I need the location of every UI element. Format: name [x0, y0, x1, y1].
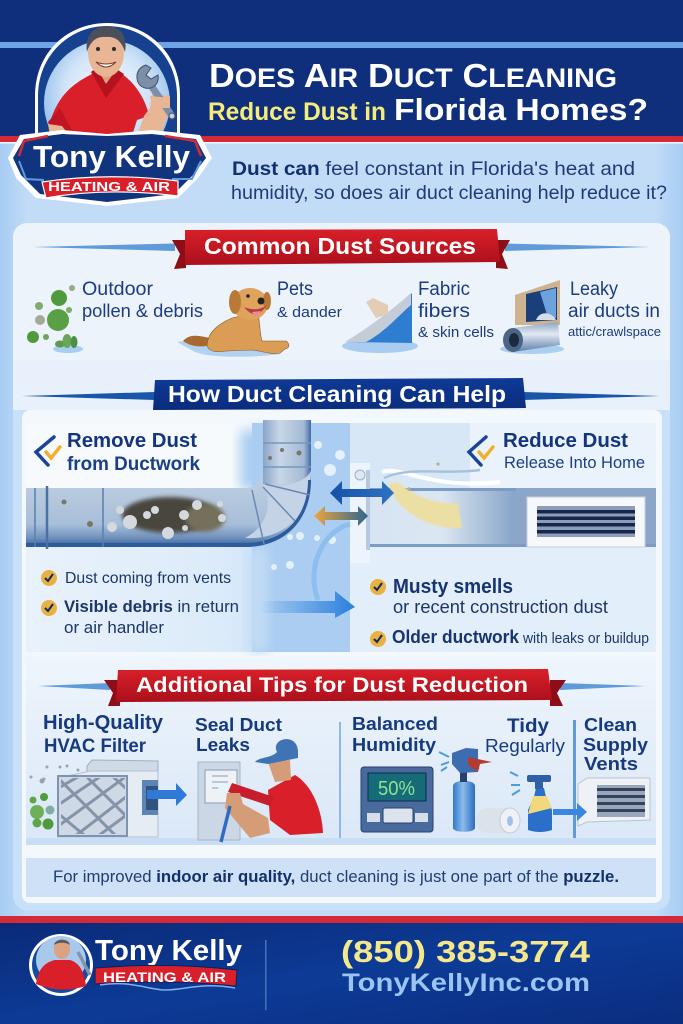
section heading: How Duct Cleaning Can Help: How Duct Cleaning Can Help [168, 381, 506, 407]
source: pets: & dander [277, 305, 342, 321]
icon: dust particles [30, 764, 80, 830]
tip: balanced humidity: Balanced [352, 713, 438, 734]
arrow [553, 803, 587, 821]
source: leaky air ducts: attic/crawlspace [568, 324, 661, 339]
heading ribbon: Common Dust Sources: Common Dust Sources [204, 233, 476, 259]
section heading: How Duct Cleaning Can Help [22, 378, 660, 410]
tip: HVAC filter [30, 714, 187, 838]
footer wordmark: Tony Kelly [95, 935, 242, 967]
icon: cleaner bottle [510, 772, 552, 832]
icon: supply vent [578, 778, 650, 826]
bullet: visible debris: or air handler [64, 619, 165, 637]
source: fabric fibers: fibers [418, 301, 470, 322]
heading: remove dust from ductwork: from Ductwork [67, 454, 200, 475]
mascot figure [48, 26, 170, 136]
tip: clean supply vents: Clean [584, 714, 637, 735]
footer ribbon: HEATING & AIR [103, 969, 226, 985]
footer logo [29, 934, 242, 996]
panel: duct illustration backdrop [26, 423, 656, 652]
icon: dog [177, 288, 289, 357]
intro text line 2: humidity, so does air duct cleaning help reduce it? [231, 182, 667, 204]
icon: leaky duct [500, 280, 564, 354]
illustration: technician sealing duct [198, 739, 323, 842]
heading: remove dust from ductwork: Remove Dust [67, 430, 197, 452]
icon: spray bottle [439, 748, 492, 832]
bullet: musty smells: or recent construction dust [393, 597, 608, 617]
heading ribbon: Additional Tips [104, 669, 566, 706]
divider [339, 722, 341, 838]
icon: cloth roll [476, 808, 520, 833]
heading: reduce dust release into home [469, 430, 645, 472]
panel: how duct cleaning can help / lower card [22, 410, 662, 903]
checklist: right [370, 576, 649, 647]
phone number: (850) 385-3774 [341, 934, 591, 969]
illustration: wall panel and vent [350, 462, 656, 563]
logo ribbon [42, 177, 178, 198]
callout: closing note [26, 858, 656, 897]
logo wordmark: Tony Kelly [33, 140, 190, 174]
tip: seal duct leaks [195, 714, 323, 842]
bullet: musty smells [370, 576, 608, 617]
icon: check chevron [469, 437, 493, 465]
source: fabric fibers: Fabric [418, 279, 470, 300]
heading ribbon: Additional Tips: Additional Tips for Dust Reduction [136, 673, 528, 697]
heading: reduce dust release into home: Release Into Home [504, 453, 645, 472]
footer [0, 916, 683, 1024]
illustration: left duct with dust [26, 420, 311, 549]
checklist: left [41, 570, 239, 637]
bullet: dust from vents: Dust coming from vents [65, 570, 231, 587]
icon: hygrometer: 50% [378, 778, 415, 800]
title: Reduce Dust in [208, 98, 386, 126]
bullet: musty smells: Musty smells [393, 576, 513, 598]
tip: balanced humidity [352, 713, 438, 832]
tip: balanced humidity: Humidity [352, 734, 437, 755]
bullet: older ductwork: Older ductwork [392, 627, 520, 647]
tip: seal duct leaks: Seal Duct [195, 714, 282, 735]
bullet: visible debris [41, 597, 239, 637]
tip: HVAC filter: High-Quality [43, 712, 164, 734]
source: outdoor pollen: Outdoor [82, 279, 154, 300]
source: leaky air ducts [500, 279, 661, 354]
source: outdoor pollen: pollen & debris [82, 301, 203, 321]
source: pets [177, 279, 342, 357]
icon: filter [57, 760, 158, 838]
website: TonyKellyInc.com [342, 969, 590, 997]
icon: wrench [137, 65, 175, 119]
icon: fabric [342, 293, 418, 353]
bullet: older ductwork: with leaks or buildup [522, 631, 649, 647]
header band [0, 0, 683, 144]
tip: HVAC filter: HVAC Filter [44, 736, 147, 757]
dust motes [271, 441, 345, 570]
bullet: older ductwork [370, 627, 649, 647]
tip: tidy regularly: Regularly [485, 736, 565, 756]
heading: reduce dust release into home: Reduce Dust [503, 430, 628, 452]
badge [8, 130, 212, 206]
divider [573, 720, 576, 838]
source: outdoor pollen [27, 279, 203, 353]
icon: check chevron [36, 437, 60, 465]
dust flakes [62, 448, 302, 527]
arrow: blue double [330, 481, 394, 505]
source: leaky air ducts: air ducts in [568, 301, 660, 322]
tip: clean supply vents [553, 714, 650, 826]
arrow: curved blue airflow [260, 524, 355, 618]
airflow swoosh [382, 462, 500, 528]
source: leaky air ducts: Leaky [570, 279, 618, 300]
tip: clean supply vents: Vents [584, 753, 638, 774]
dust buildup [107, 497, 226, 539]
panel: common dust sources [13, 223, 670, 910]
title: DOES AIR DUCT CLEANING [209, 57, 617, 94]
section rule [32, 244, 650, 251]
bullet: visible debris: Visible debris in return [64, 597, 239, 616]
logo ribbon: HEATING & AIR [48, 179, 171, 194]
icon: pollen [27, 285, 83, 353]
arrow [147, 783, 187, 806]
callout: closing note: For improved indoor air quality, duct cleaning is just one part of the puzzle. [53, 868, 619, 886]
footer ribbon [95, 965, 237, 986]
tip: seal duct leaks: Leaks [196, 734, 250, 755]
title [208, 57, 648, 127]
tip: tidy regularly [439, 716, 565, 833]
source: fabric fibers [342, 279, 494, 353]
tip: clean supply vents: Supply [583, 734, 649, 755]
logo: Tony Kelly header badge [8, 23, 212, 206]
source: pets: Pets [277, 279, 313, 300]
source: fabric fibers: & skin cells [418, 324, 494, 341]
vent grille [527, 497, 645, 547]
heading ribbon: Common Dust Sources [172, 229, 510, 269]
tip: tidy regularly: Tidy [507, 716, 549, 737]
divider [265, 940, 266, 1010]
title: Florida Homes? [394, 92, 648, 127]
intro text: Dust can feel constant in Florida's heat and [232, 158, 635, 180]
mascot dome [35, 23, 180, 166]
arrow: orange teal double [314, 506, 368, 526]
heading: remove dust from ductwork [36, 430, 200, 475]
panel: additional tips [20, 656, 656, 845]
